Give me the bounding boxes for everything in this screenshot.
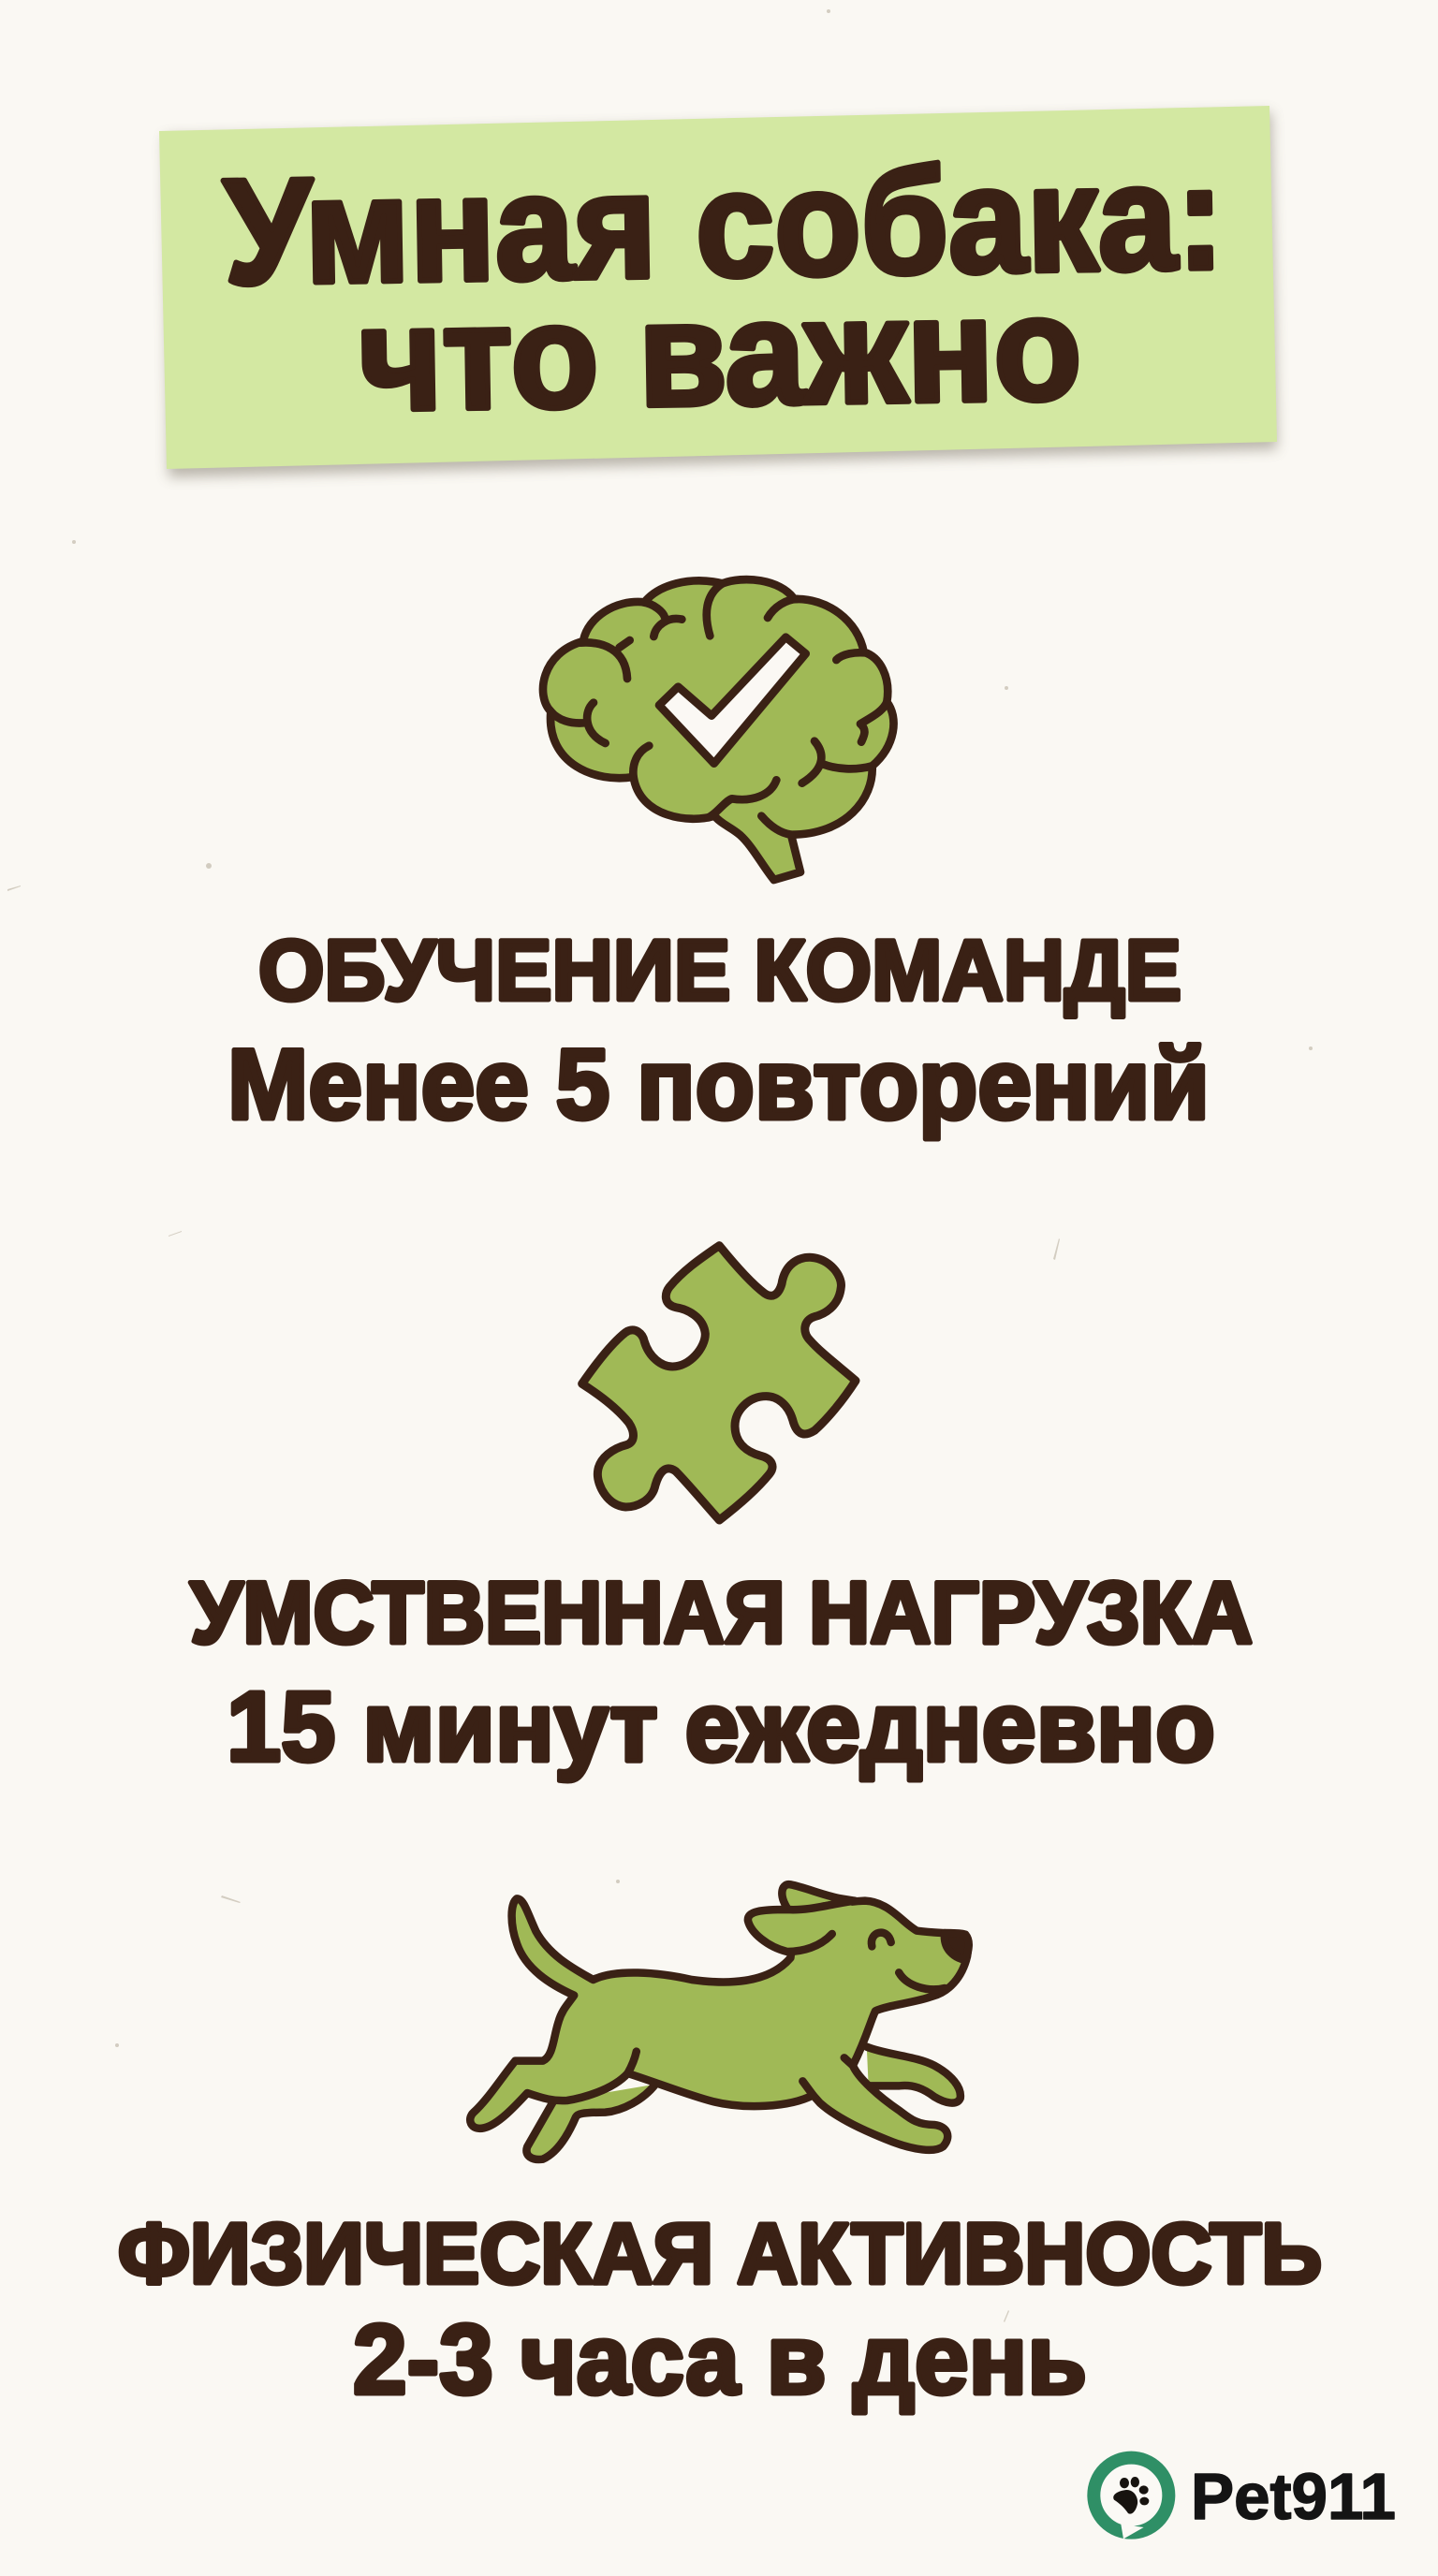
heading: physical activity: ФИЗИЧЕСКАЯ АКТИВНОСТЬ xyxy=(118,2206,1322,2302)
icon: puzzle piece xyxy=(582,1246,856,1520)
logo: Pet911 xyxy=(1093,2458,1396,2539)
value: physical activity: 2-3 часа в день xyxy=(353,2305,1087,2415)
section: mental load xyxy=(190,1246,1253,1782)
value: mental load: 15 минут ежедневно xyxy=(227,1672,1215,1782)
title line 1: Умная собака: xyxy=(223,132,1225,315)
icon: brain with check mark xyxy=(543,579,894,880)
icon: running dog xyxy=(470,1884,969,2159)
heading: mental load: УМСТВЕННАЯ НАГРУЗКА xyxy=(190,1563,1253,1661)
icon: paw in green speech bubble xyxy=(1093,2458,1168,2539)
title line 2: что важно xyxy=(358,266,1082,442)
section: training xyxy=(227,579,1210,1140)
title panel xyxy=(159,106,1277,477)
section: physical activity xyxy=(118,1884,1322,2415)
logo wordmark: Pet911 xyxy=(1191,2460,1396,2533)
value: training: Менее 5 повторений xyxy=(227,1028,1210,1140)
heading: training: ОБУЧЕНИЕ КОМАНДЕ xyxy=(258,923,1181,1018)
